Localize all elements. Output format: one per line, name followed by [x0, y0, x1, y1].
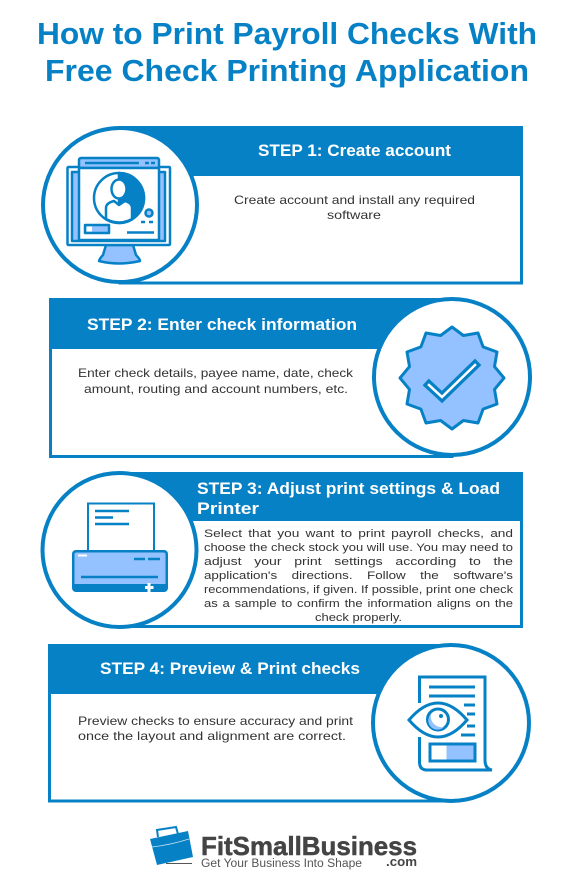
title: How to Print Payroll Checks With [37, 16, 537, 51]
logo wordmark: FitSmallBusiness [201, 831, 417, 861]
panel: step 1 [43, 126, 523, 283]
step 4 heading: STEP 4: Preview & Print checks [100, 660, 360, 678]
step 4 description: once the layout and alignment are correct. [78, 729, 346, 743]
icon: badge with check mark [400, 327, 504, 429]
step 4 card [50, 646, 452, 801]
step 3 card [118, 474, 522, 626]
icon: document with eye [409, 677, 492, 770]
step 3 description [204, 528, 513, 624]
step 2 header band [49, 298, 452, 349]
step 4 description [78, 714, 354, 743]
step 2 circle [374, 299, 530, 455]
logo: Fit Small Business [150, 827, 417, 870]
step 3 header band [118, 472, 523, 521]
step 1 card [120, 128, 522, 283]
step 3 heading: Printer [197, 500, 260, 518]
step 1 description: software [327, 208, 381, 222]
title: Free Check Printing Application [45, 53, 529, 88]
step 1 description [234, 193, 475, 222]
step 1 circle [43, 128, 197, 282]
step 1 description: Create account and install any required [234, 193, 475, 207]
logo domain: .com [386, 854, 417, 869]
step 4 header band [48, 644, 452, 694]
step 3 circle [42, 473, 196, 627]
logo tagline: Get Your Business Into Shape [201, 858, 362, 870]
panel: step 4 [48, 644, 529, 801]
step 3 description: Select that you want to print payroll checks, and [204, 528, 513, 540]
title [37, 16, 537, 88]
step 2 heading: STEP 2: Enter check information [87, 316, 357, 334]
step 4 description: Preview checks to ensure accuracy and print [78, 714, 354, 728]
step 2 card [50, 300, 452, 456]
step 4 circle [373, 645, 529, 801]
panel: step 2 [49, 298, 530, 456]
step 3 heading [197, 480, 500, 518]
step 3 description: adjust your print settings according to the [204, 556, 513, 568]
step 3 description: application's directions. Follow the software's [204, 570, 513, 582]
step 2 description [78, 366, 354, 396]
step 3 description: check properly. [315, 612, 402, 624]
panel: step 3 [42, 472, 523, 627]
step 3 description: choose the check stock you will use. You may need to [204, 542, 513, 554]
step 3 heading: STEP 3: Adjust print settings & Load [197, 480, 500, 498]
step 3 description: as a sample to confirm the information aligns on the [204, 598, 513, 610]
icon: printer [72, 504, 168, 592]
step 1 header band [120, 126, 523, 176]
icon: briefcase [150, 827, 193, 865]
step 3 description: recommendations, if given. If possible, print one check [204, 584, 513, 596]
icon: computer monitor with user profile [68, 158, 170, 264]
step 2 description: amount, routing and account numbers, etc. [84, 382, 348, 396]
step 1 heading: STEP 1: Create account [258, 142, 452, 160]
step 2 description: Enter check details, payee name, date, check [78, 366, 354, 380]
